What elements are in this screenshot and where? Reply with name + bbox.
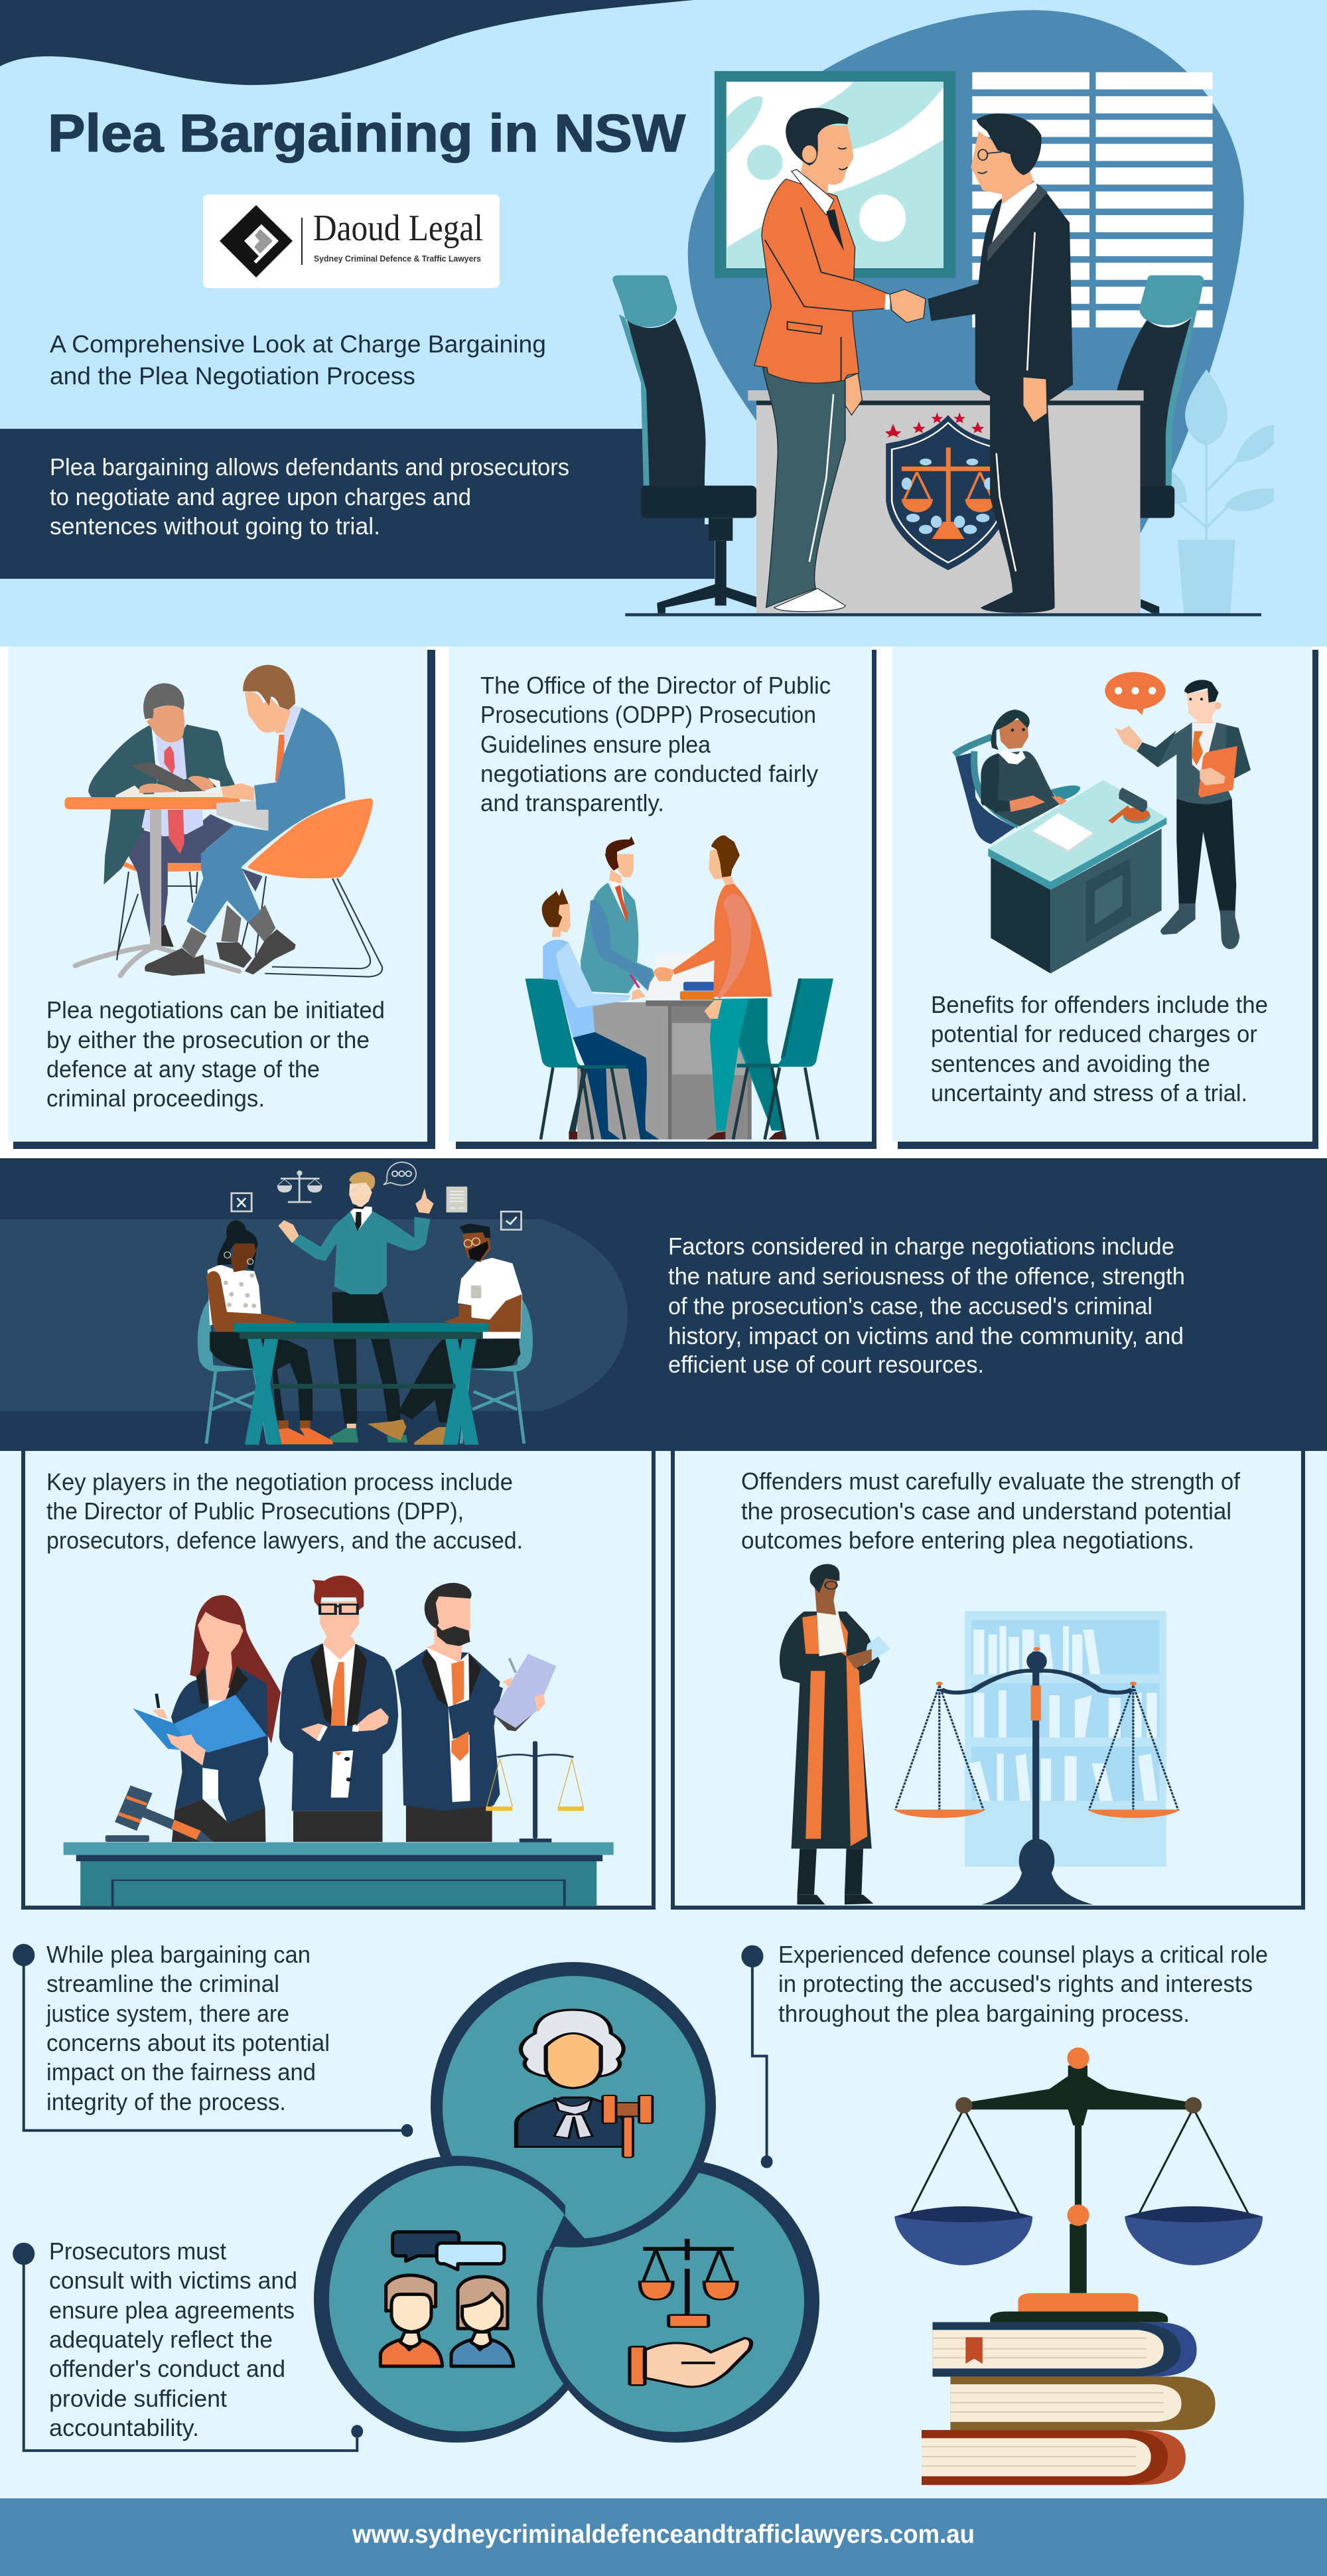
text (480, 672, 831, 816)
band: summary (0, 429, 715, 579)
text: Offenders must carefully evaluate the strength of (741, 1468, 1241, 1495)
book stack (922, 2322, 1216, 2485)
icon: check box (501, 1211, 522, 1230)
band: summary: sentences without going to trial. (50, 512, 380, 540)
decorative wave (0, 0, 694, 85)
text: concerns (46, 1941, 330, 2115)
gavel (105, 1785, 214, 1842)
text: prosecutors: adequately reflect the (49, 2326, 273, 2353)
illustration: two men at table (64, 665, 382, 977)
text: defence counsel: Experienced defence counsel plays a critical role (778, 1941, 1268, 1968)
illustration: three lawyers (105, 1576, 584, 1843)
text: of the prosecution's case, the accused's criminal (668, 1292, 1152, 1320)
text (46, 1468, 523, 1554)
speech bubble (1105, 672, 1166, 715)
text: Factors considered in charge negotiations include (668, 1233, 1174, 1260)
window (715, 71, 955, 278)
text: Guidelines ensure plea (480, 731, 711, 758)
emblem: shield with scales (885, 412, 1011, 570)
text: concerns: impact on the fairness and (46, 2058, 316, 2085)
woman (133, 1595, 281, 1842)
venn diagram with icons (314, 1962, 819, 2443)
text (46, 996, 385, 1112)
barrister (780, 1564, 890, 1904)
text: efficient use of court resources. (668, 1351, 984, 1378)
band: summary: to negotiate and agree upon charges and (50, 483, 471, 510)
text (741, 1468, 1241, 1554)
lower page background (0, 1451, 1327, 2498)
centre man (279, 1576, 398, 1842)
illustration: scales of justice on books (894, 2048, 1263, 2485)
text: prosecutors: ensure plea agreements (49, 2297, 295, 2324)
illustration: meeting around table (198, 1162, 533, 1445)
illustration: handshake at office (612, 10, 1274, 616)
background tab (0, 1219, 628, 1411)
panel: key players (23, 1451, 654, 1908)
right man (395, 1583, 556, 1842)
icon: scales (277, 1170, 322, 1202)
text: negotiations are conducted fairly (480, 760, 818, 787)
text: sentences and avoiding the (931, 1050, 1210, 1077)
panel: hero header (0, 0, 1327, 646)
subtitle: A Comprehensive Look at Charge Bargaining (50, 331, 546, 358)
text: concerns: integrity of the process. (46, 2088, 286, 2115)
footer: www.sydneycriminaldefenceandtrafficlawyers.com.au (352, 2520, 975, 2549)
scale (894, 1647, 1180, 1904)
text: prosecutors: provide sufficient (49, 2385, 227, 2412)
subtitle (50, 331, 546, 390)
connector: defence counsel (741, 1945, 773, 2168)
table (234, 1323, 488, 1445)
logo: Daoud Legal: Daoud Legal (313, 208, 483, 249)
text: The Office of the Director of Public (480, 672, 831, 699)
text: Prosecutions (ODPP) Prosecution (480, 701, 816, 728)
small gold scale (486, 1741, 584, 1843)
text: prosecutors (49, 2237, 297, 2441)
plant (1171, 370, 1274, 613)
icon: judge (516, 2010, 652, 2157)
text: prosecutors: offender's conduct and (49, 2355, 285, 2382)
panel: benefits for offenders (892, 646, 1318, 1149)
right chair (1117, 275, 1204, 613)
desk (64, 1843, 614, 1906)
illustration: judge and lawyer (954, 672, 1251, 974)
icon: speech bubble (384, 1162, 416, 1185)
text: Plea negotiations can be initiated (46, 996, 385, 1023)
text: prosecutors: Prosecutors must (49, 2237, 226, 2265)
text: outcomes before entering plea negotiations. (741, 1527, 1194, 1554)
band: summary: Plea bargaining allows defendants and prosecutors (50, 453, 569, 481)
text: prosecutors: consult with victims and (49, 2267, 297, 2294)
panel: ODPP guidelines (449, 646, 876, 1149)
left chair (612, 275, 756, 613)
connector: prosecutors (13, 2243, 363, 2451)
icon: hand holding scales (630, 2239, 751, 2387)
text: Benefits for offenders include the (931, 991, 1268, 1018)
window blinds (972, 72, 1213, 327)
ground line (625, 613, 1261, 616)
panel: bottom venn section (13, 1941, 1268, 2485)
figure: left man in orange jacket (754, 108, 926, 611)
footer (0, 2498, 1327, 2576)
figure: right man in dark suit (928, 114, 1073, 613)
panel: evaluating the case (673, 1451, 1303, 1908)
text: concerns: justice system, there are (46, 2000, 289, 2027)
text: prosecutors, defence lawyers, and the accused. (46, 1527, 523, 1554)
illustration: three people at table (525, 836, 833, 1140)
icon: document (447, 1187, 467, 1213)
icon: two people talking (380, 2232, 514, 2366)
woman (206, 1220, 333, 1444)
seated man (368, 1223, 522, 1445)
text (931, 991, 1268, 1106)
logo: Daoud Legal (203, 194, 500, 288)
illustration: barrister and scales (780, 1564, 1180, 1904)
text: potential for reduced charges or (931, 1020, 1257, 1047)
bookshelf (965, 1611, 1166, 1866)
text: defence counsel (778, 1941, 1268, 2027)
text: defence counsel: in protecting the accused's rights and interests (778, 1970, 1253, 1997)
text: the Director of Public Prosecutions (DPP), (46, 1497, 464, 1525)
text: uncertainty and stress of a trial. (931, 1079, 1247, 1106)
panel: initiating negotiations (8, 646, 435, 1149)
panel: factors band (0, 1158, 1327, 1451)
text (668, 1233, 1185, 1378)
subtitle: and the Plea Negotiation Process (50, 362, 415, 390)
text: criminal proceedings. (46, 1085, 265, 1112)
text: and transparently. (480, 789, 664, 816)
text: defence at any stage of the (46, 1055, 320, 1083)
logo: Daoud Legal: Sydney Criminal Defence & Traffic Lawyers (314, 254, 481, 264)
icon: cross box (232, 1193, 251, 1211)
text: by either the prosecution or the (46, 1026, 370, 1053)
chairs (198, 1299, 533, 1444)
text: concerns: concerns about its potential (46, 2029, 330, 2056)
title: Plea Bargaining in NSW (48, 104, 686, 163)
text: history, impact on victims and the community, and (668, 1322, 1184, 1349)
text: prosecutors: accountability. (49, 2414, 199, 2441)
text: the nature and seriousness of the offence, strength (668, 1262, 1185, 1290)
connector: concerns (13, 1944, 413, 2137)
text: the prosecution's case and understand potential (741, 1497, 1231, 1525)
text: defence counsel: throughout the plea bargaining process. (778, 2000, 1190, 2027)
desk (748, 390, 1144, 613)
standing man (278, 1172, 434, 1442)
text: Key players in the negotiation process include (46, 1468, 513, 1495)
text: concerns: streamline the criminal (46, 1970, 279, 1997)
text: concerns: While plea bargaining can (46, 1941, 311, 1968)
